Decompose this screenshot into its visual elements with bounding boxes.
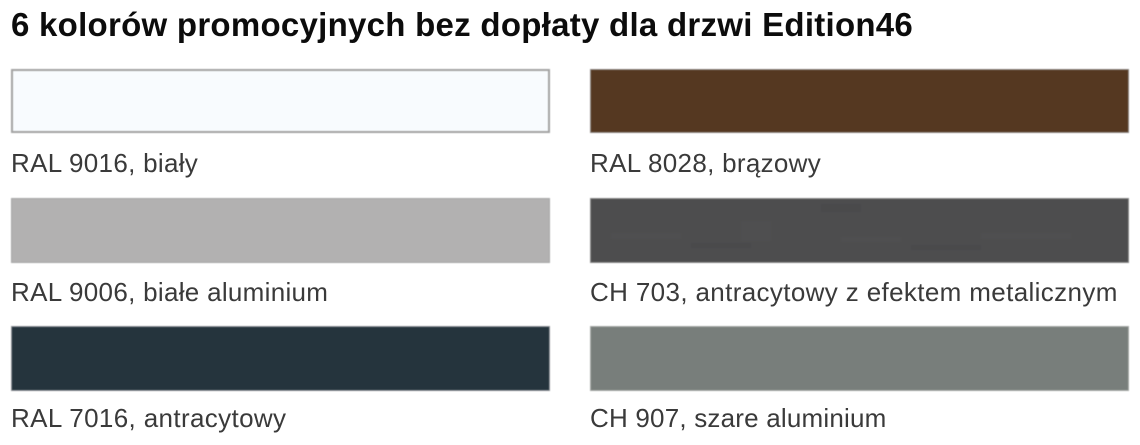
swatch: CH 907 grey aluminium	[590, 326, 1129, 391]
swatch: CH 703 metallic anthracite	[590, 198, 1129, 263]
swatch: RAL 9016 white	[11, 69, 550, 133]
label: RAL 9006: RAL 9006, białe aluminium	[11, 277, 328, 307]
label: CH 907: CH 907, szare aluminium	[590, 403, 886, 433]
label: RAL 8028: RAL 8028, brązowy	[590, 148, 821, 178]
label: RAL 7016: RAL 7016, antracytowy	[11, 403, 286, 433]
swatch: RAL 7016 anthracite	[11, 326, 550, 391]
label: CH 703: CH 703, antracytowy z efektem metalicznym	[590, 277, 1118, 307]
swatch: RAL 9006 white aluminium	[11, 198, 550, 263]
swatch: RAL 8028 brown	[590, 69, 1129, 133]
title: 6 kolorów promocyjnych bez dopłaty dla drzwi Edition46	[11, 6, 913, 43]
label: RAL 9016: RAL 9016, biały	[11, 148, 198, 178]
